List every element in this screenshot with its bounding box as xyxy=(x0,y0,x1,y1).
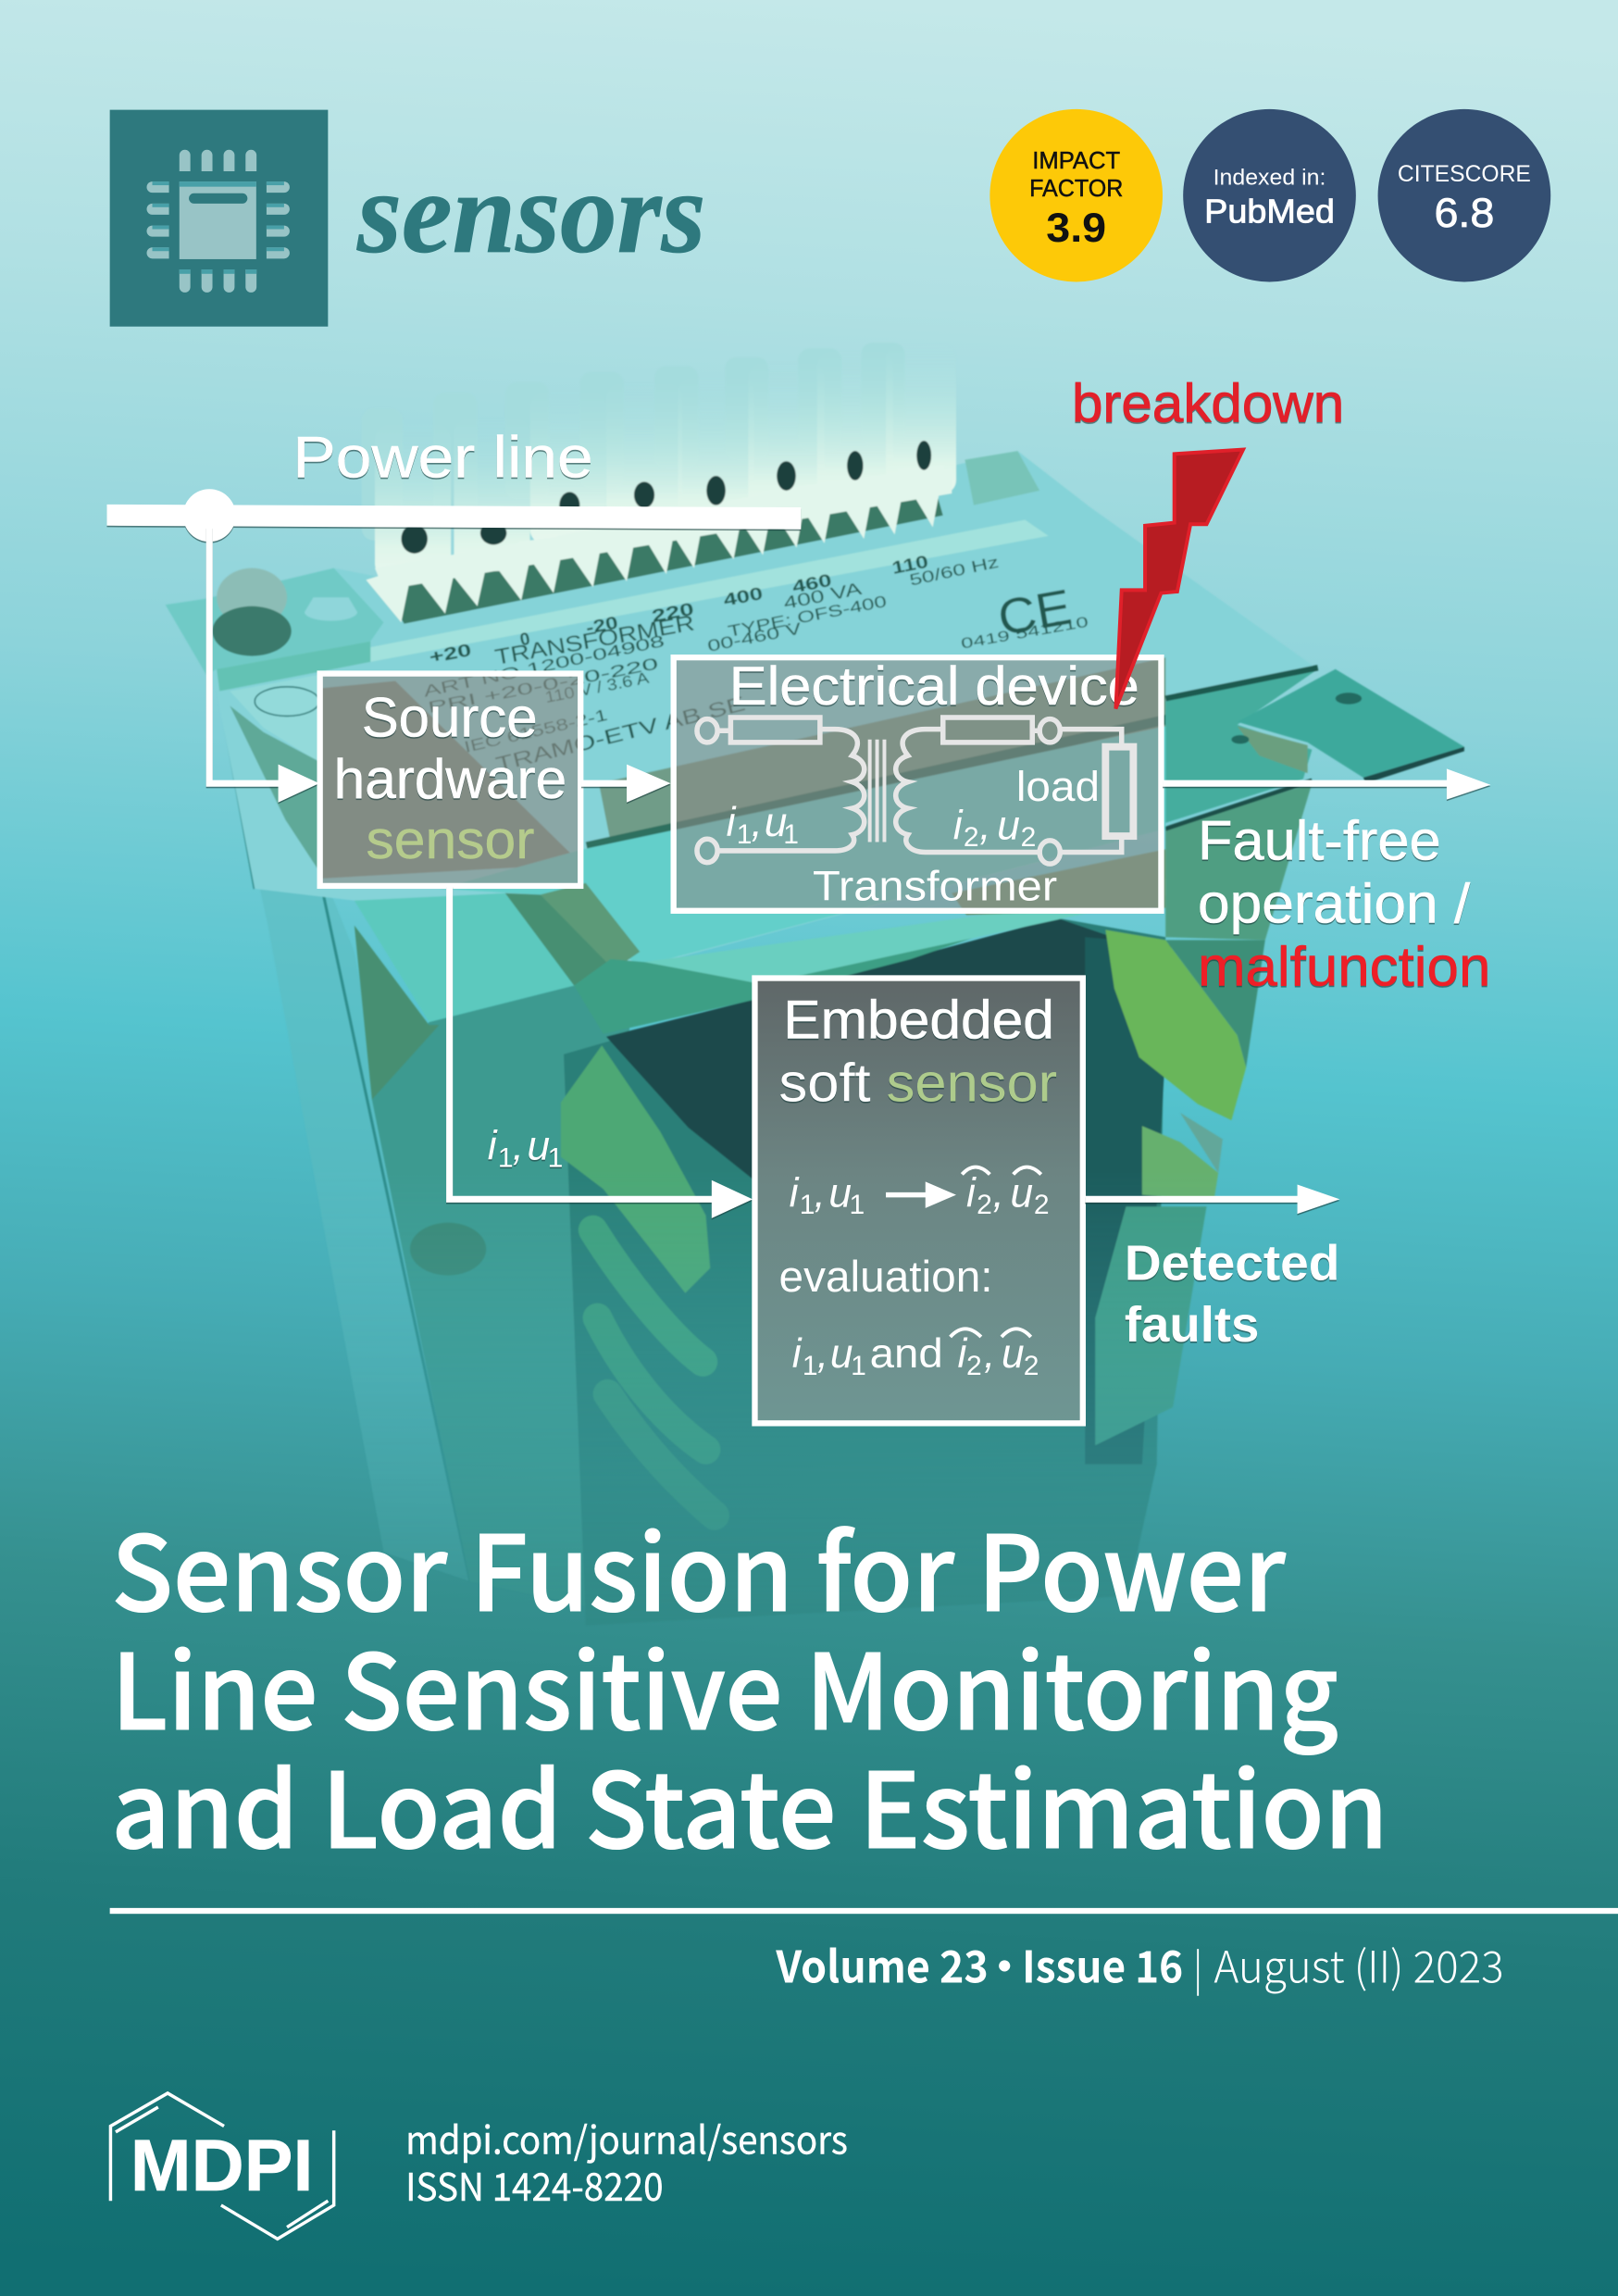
badge: indexed in PubMed: Indexed in: xyxy=(1214,166,1326,190)
evaluation formula: 2 xyxy=(1024,1351,1039,1381)
i2 u2 secondary label: , xyxy=(979,803,991,848)
label: power line: Power line xyxy=(292,426,593,491)
photo: transformer illustration: ART NO 1200-04908 xyxy=(421,631,666,701)
photo: transformer illustration: TYPE: OFS-400 xyxy=(727,592,888,641)
photo: transformer illustration: 110 V / 3.6 A xyxy=(543,668,651,706)
evaluation formula: i xyxy=(958,1331,968,1377)
transformer circuit schematic xyxy=(697,718,1133,864)
sensor label: sensor xyxy=(366,810,534,870)
arrow: source hardware to electrical device xyxy=(581,765,671,803)
issue information: August (II) 2023 xyxy=(1214,1932,1504,1996)
arrow: electrical device output xyxy=(1163,768,1490,800)
MDPI logo xyxy=(110,2093,334,2239)
photo: transformer illustration: 50/60 Hz xyxy=(908,553,1001,590)
estimation formula: , xyxy=(815,1170,826,1216)
badge: impact factor: IMPACT xyxy=(1032,146,1120,174)
label: fault-free operation / malfunction: operation / xyxy=(1198,872,1471,934)
i2 u2 secondary label: i xyxy=(953,803,964,848)
photo: transformer illustration: -20 xyxy=(584,614,619,639)
estimation formula: u xyxy=(1011,1170,1033,1216)
photo: transformer illustration: +20 xyxy=(428,641,473,668)
i2 u2 secondary label: 2 xyxy=(1021,822,1036,853)
icon: microchip xyxy=(147,150,290,293)
evaluation label: evaluation: xyxy=(779,1253,993,1302)
badge: impact factor xyxy=(989,109,1163,281)
badge: impact factor: 3.9 xyxy=(1046,206,1106,251)
icon: lightning bolt xyxy=(1115,450,1243,709)
badge: citescore: CITESCORE xyxy=(1398,161,1531,187)
title: and Load State Estimation xyxy=(111,1728,1388,1878)
photo: transformer illustration: PRI +20-0-20-220 xyxy=(426,654,660,717)
evaluation formula: 1 xyxy=(803,1351,818,1381)
evaluation formula: , xyxy=(817,1331,828,1377)
photo: transformer illustration: IEC 61558-2-1 xyxy=(462,705,609,756)
i1 u1 primary label: 1 xyxy=(737,819,752,850)
badge: impact factor: FACTOR xyxy=(1029,174,1123,202)
badge: indexed in PubMed xyxy=(1183,109,1356,281)
journal name: sensors xyxy=(356,148,705,278)
panel: electrical device xyxy=(674,656,1161,911)
photo: transformer illustration: CE xyxy=(994,579,1076,646)
photo: transformer illustration: TRAMO-ETV AB SE xyxy=(493,692,748,776)
photo: transformer illustration: 110 xyxy=(890,553,930,579)
photo: transformer illustration: 400 xyxy=(722,584,765,611)
badge: citescore xyxy=(1378,109,1550,281)
badge: indexed in PubMed: PubMed xyxy=(1204,192,1335,230)
estimation formula: 1 xyxy=(850,1190,865,1220)
journal logo tile xyxy=(110,110,328,327)
label: detected faults xyxy=(1125,1235,1339,1353)
arrow: embedded soft sensor output xyxy=(1085,1185,1339,1214)
source hardware label: hardware xyxy=(334,748,566,810)
estimation formula: , xyxy=(993,1170,1004,1216)
embedded soft sensor heading: soft sensor xyxy=(779,1053,1057,1113)
badge: citescore: 6.8 xyxy=(1434,191,1494,236)
journal url and ISSN xyxy=(405,2110,848,2212)
arrow: power line to source hardware sensor xyxy=(209,527,319,803)
estimation formula: 2 xyxy=(977,1190,992,1220)
photo: transformer illustration: 0 xyxy=(518,630,531,650)
load label: load xyxy=(1016,762,1100,810)
label: fault-free operation / malfunction: Fault-free xyxy=(1198,809,1441,871)
label: i1 u1 signal: , xyxy=(513,1124,524,1169)
issue information xyxy=(775,1932,1504,1996)
label: i1 u1 signal: 1 xyxy=(498,1143,514,1174)
i1 u1 primary label: u xyxy=(765,800,787,845)
evaluation formula: 1 xyxy=(851,1351,866,1381)
photo: transformer illustration: 0419 541210 xyxy=(960,615,1089,653)
estimation formula: i xyxy=(790,1170,800,1216)
label: i1 u1 signal: u xyxy=(527,1124,550,1169)
label: fault-free operation / malfunction xyxy=(1198,809,1490,997)
arrow: source hardware sensor to embedded soft sensor xyxy=(450,886,753,1218)
label: i1 u1 signal: 1 xyxy=(548,1143,563,1174)
panel: source hardware sensor xyxy=(320,674,580,886)
issue information: · xyxy=(982,1932,1027,1996)
evaluation formula xyxy=(792,1329,1039,1381)
i2 u2 secondary label: u xyxy=(997,803,1020,848)
source hardware label: Source xyxy=(362,687,538,749)
i1 u1 primary label: 1 xyxy=(783,819,799,850)
source hardware label xyxy=(334,687,566,810)
transformer label: Transformer xyxy=(813,862,1057,910)
i2 u2 secondary label: 2 xyxy=(964,822,979,853)
journal url and ISSN: ISSN 1424-8220 xyxy=(405,2156,664,2212)
label: fault-free operation / malfunction: malfunction xyxy=(1198,935,1490,997)
evaluation formula: 2 xyxy=(966,1351,982,1381)
electrical device heading: Electrical device xyxy=(729,656,1139,717)
i1 u1 primary label: , xyxy=(752,800,763,845)
photo: transformer illustration: 00-460 V xyxy=(706,618,803,655)
power line bar with junction xyxy=(106,489,801,542)
estimation formula: 1 xyxy=(800,1190,815,1220)
label: i1 u1 signal: i xyxy=(488,1124,498,1169)
evaluation formula: and xyxy=(870,1331,943,1377)
estimation formula: i xyxy=(966,1170,977,1216)
issue information: Issue 16 xyxy=(1022,1932,1183,1996)
estimation formula: u xyxy=(828,1170,852,1216)
title: Sensor Fusion for Power xyxy=(111,1491,1287,1641)
label: detected faults: Detected xyxy=(1125,1235,1339,1291)
photo: transformer illustration: 220 xyxy=(650,600,696,627)
embedded soft sensor heading: Embedded xyxy=(783,990,1054,1050)
title: Line Sensitive Monitoring xyxy=(111,1610,1338,1760)
evaluation formula: u xyxy=(1002,1331,1025,1377)
estimation formula: 2 xyxy=(1034,1190,1050,1220)
panel: embedded soft sensor xyxy=(754,979,1083,1423)
i1 u1 primary label: i xyxy=(727,800,737,845)
journal url and ISSN: mdpi.com/journal/sensors xyxy=(405,2110,848,2165)
label: detected faults: faults xyxy=(1125,1297,1259,1353)
label: breakdown: breakdown xyxy=(1072,374,1344,434)
evaluation formula: , xyxy=(984,1331,995,1377)
photo: transformer illustration: 460 xyxy=(790,571,833,597)
estimation formula xyxy=(790,1167,1050,1220)
evaluation formula: u xyxy=(830,1331,853,1377)
MDPI wordmark: MDPI xyxy=(131,2124,314,2206)
photo: transformer illustration: 400 VA xyxy=(782,580,864,614)
issue information: Volume 23 xyxy=(775,1932,989,1996)
title xyxy=(111,1491,1388,1878)
embedded soft sensor heading xyxy=(779,990,1057,1113)
photo: transformer illustration: TRANSFORMER xyxy=(493,611,696,670)
photo: transformer illustration xyxy=(166,343,1464,1626)
evaluation formula: i xyxy=(792,1331,803,1377)
